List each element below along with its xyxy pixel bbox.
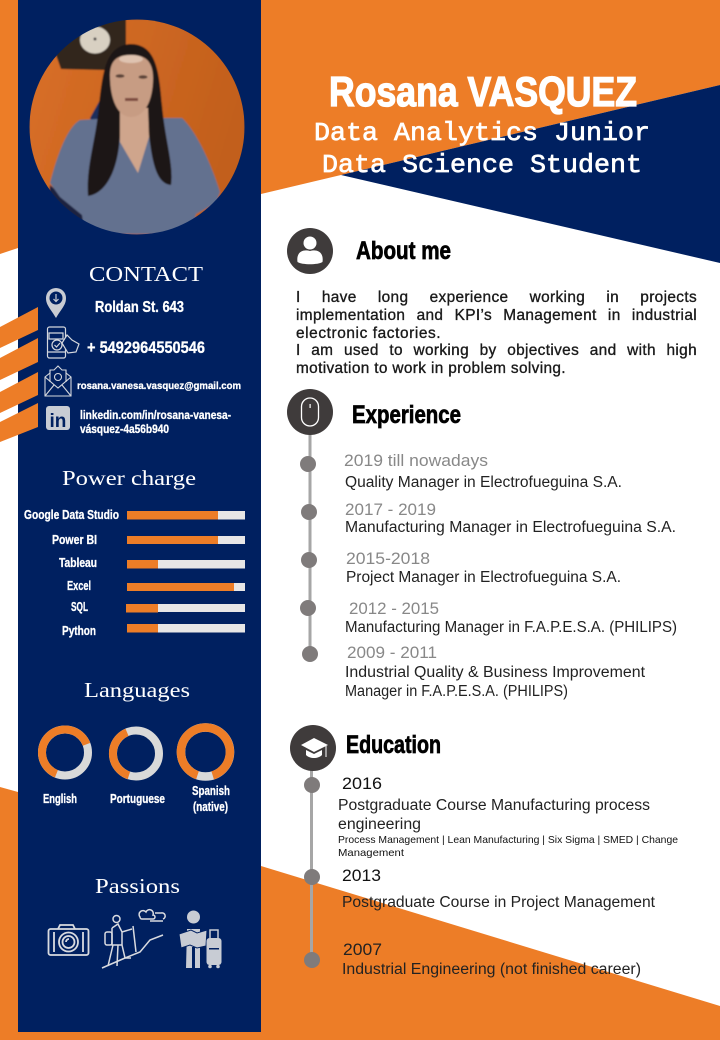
experience entries: 2009 - 2011 [347, 643, 437, 662]
experience entries [344, 451, 677, 700]
contact: address: Roldan St. 643 [95, 299, 184, 316]
subtitle [314, 118, 650, 180]
language labels: (native) [193, 800, 228, 814]
icon: about me [287, 228, 333, 274]
title: name: Rosana VASQUEZ [329, 68, 637, 115]
education entries: 2007 [343, 940, 382, 959]
icon: education [290, 725, 336, 771]
donut: spanish [181, 728, 230, 776]
language labels: Portuguese [110, 792, 165, 806]
education entries [338, 774, 678, 978]
text block: about me: electronic factories. [296, 325, 441, 342]
icon: envelope [45, 366, 71, 396]
bar chart: skills: Tableau [59, 556, 97, 570]
bar chart: skills: Power BI [52, 533, 97, 547]
education entries: 2016 [342, 774, 382, 793]
icon: experience [287, 389, 333, 435]
language labels: Spanish [192, 784, 230, 798]
panel: sidebar [18, 0, 261, 1032]
contact: phone: + 5492964550546 [87, 338, 205, 357]
education entries: Industrial Engineering (not finished career) [342, 961, 641, 978]
bar chart: skills: Google Data Studio [24, 508, 119, 522]
education entries: Postgraduate Course in Project Management [342, 894, 656, 911]
icon: linkedin: in [50, 411, 66, 432]
experience entries: Manufacturing Manager in Electrofueguina S.A. [345, 519, 676, 536]
icon: camera [48, 925, 88, 955]
experience entries: Project Manager in Electrofueguina S.A. [346, 569, 621, 586]
text block: about me: implementation and KPI’s Management in industrial [296, 307, 697, 324]
heading: about me: About me [356, 237, 451, 265]
contact: email: rosana.vanesa.vasquez@gmail.com [77, 380, 241, 392]
heading: education: Education [346, 731, 441, 759]
experience entries: 2012 - 2015 [349, 599, 439, 618]
education entries: Process Management | Lean Manufacturing | Six Sigma | SMED | Change [338, 834, 678, 846]
experience entries: Manufacturing Manager in F.A.P.E.S.A. (PHILIPS) [345, 619, 677, 636]
heading: contact: CONTACT [89, 262, 203, 286]
timeline: experience [300, 434, 318, 662]
text block: about me: I am used to working by objectives and with high [296, 342, 697, 359]
icon: hiker [102, 910, 165, 968]
heading: experience: Experience [352, 401, 461, 429]
icon: phone [48, 327, 79, 358]
icon: traveler [179, 910, 222, 968]
education entries: engineering [338, 816, 421, 833]
contact: linkedin [80, 408, 231, 436]
donut: english [42, 729, 88, 776]
education entries: Postgraduate Course Manufacturing process [338, 797, 650, 814]
experience entries: 2015-2018 [346, 549, 430, 568]
text block: about me: motivation to work in problem solving. [296, 360, 566, 377]
subtitle: Data Analytics Junior [314, 118, 650, 148]
timeline: education [304, 768, 320, 968]
experience entries: Industrial Quality & Business Improvement [345, 664, 646, 681]
bar chart: skills: Excel [67, 579, 91, 593]
text block: about me [296, 289, 697, 377]
education entries: Management [338, 847, 404, 859]
portrait photo [29, 15, 245, 235]
language labels [43, 784, 230, 814]
icon: linkedin [46, 406, 70, 432]
contact: linkedin: linkedin.com/in/rosana-vanesa- [80, 408, 231, 422]
donut: portuguese [113, 730, 159, 776]
experience entries: 2019 till nowadays [344, 451, 488, 470]
contact: linkedin: vásquez-4a56b940 [80, 422, 169, 436]
bar chart: skills [24, 508, 245, 638]
text block: about me: I have long experience working in projects [296, 289, 697, 306]
bar chart: skills: SQL [71, 600, 88, 614]
subtitle: Data Science Student [322, 150, 642, 180]
experience entries: 2017 - 2019 [345, 500, 436, 519]
heading: power charge: Power charge [62, 466, 196, 490]
language labels: English [43, 792, 77, 806]
experience entries: Quality Manager in Electrofueguina S.A. [345, 474, 622, 491]
heading: passions: Passions [95, 874, 180, 898]
decorative orange stripes [0, 307, 38, 442]
heading: languages: Languages [84, 678, 190, 702]
icon: location pin [46, 288, 66, 318]
education entries: 2013 [342, 866, 381, 885]
experience entries: Manager in F.A.P.E.S.A. (PHILIPS) [345, 683, 568, 700]
bar chart: skills: Python [62, 624, 96, 638]
